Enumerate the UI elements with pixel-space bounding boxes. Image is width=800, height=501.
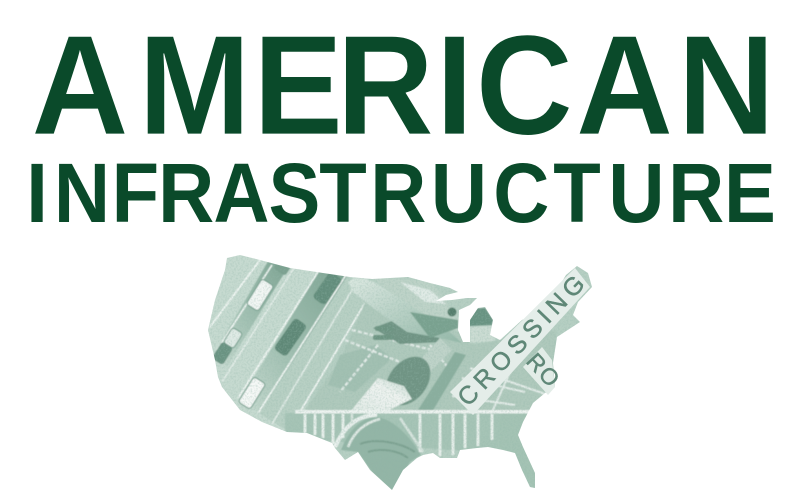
cars <box>212 257 343 409</box>
road sign: Crossing: CROSSING <box>452 270 590 412</box>
Michigan detail <box>469 308 493 326</box>
airfield ground <box>328 282 458 392</box>
subtitle: Infrastructure: INFRASTRUCTURE <box>26 147 776 241</box>
eastern farmland <box>453 374 460 382</box>
bridge <box>285 410 540 495</box>
airplane <box>348 279 462 344</box>
title: American: AMERICAN <box>31 7 775 165</box>
map: United States photo collage <box>208 255 592 490</box>
highway <box>208 255 368 431</box>
pipeline <box>350 338 466 414</box>
photo grain <box>208 256 588 458</box>
road sign: Road: RO <box>521 348 565 392</box>
